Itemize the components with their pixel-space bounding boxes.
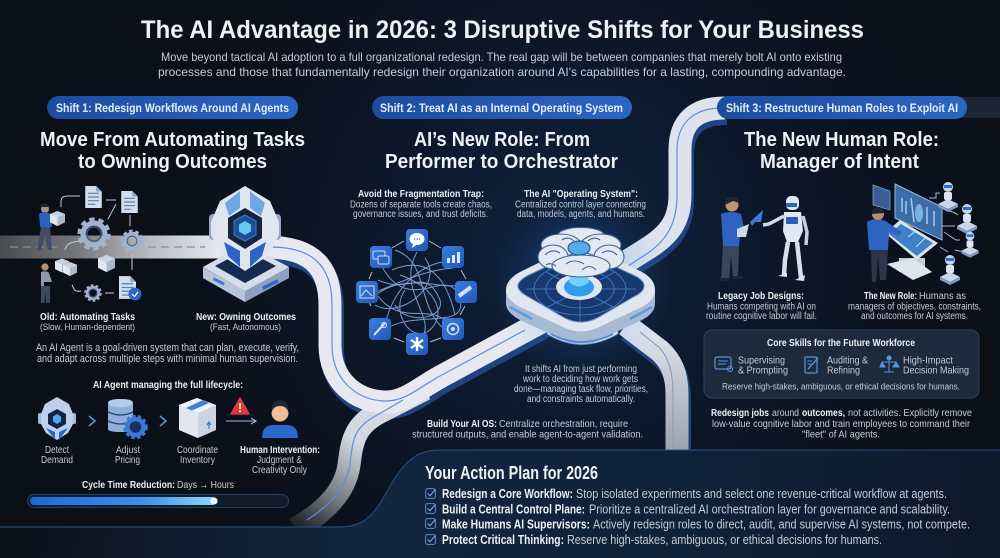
operating system text: data, models, agents, and humans. [517,209,645,220]
fragmentation text: Dozens of separate tools create chaos, [350,200,492,210]
lifecycle labels: Demand [41,455,73,466]
shift explanation: It shifts AI from just performing [525,364,637,375]
new label: New: Owning Outcomes [196,312,296,323]
human with laptop [720,197,749,281]
console [885,220,938,280]
new role text [848,291,981,322]
intro line 1: Move beyond tactical AI adoption to a full organizational redesign. The real gap will be between companies that merely bolt AI onto existing [161,50,842,64]
shift 1 heading: Move From Automating Tasks [40,128,305,151]
lifecycle labels: Inventory [180,455,215,466]
action item 4: Protect Critical Thinking: [442,533,564,547]
shift 3 heading: Manager of Intent [760,150,919,173]
redesign jobs text [711,407,972,440]
legacy text: Legacy Job Designs: [718,291,804,302]
brain [538,228,624,277]
new role illustration [867,182,979,285]
skill: supervising: Supervising [738,354,785,366]
agent definition: An AI Agent is a goal-driven system that can plan, execute, verify, [36,342,299,354]
platform grid [526,262,636,322]
operating system text [515,189,646,220]
cycle time: Days → Hours [177,479,234,491]
central AI platform [491,195,671,375]
speech panel [873,185,890,210]
tool icon: network [442,318,464,340]
lifecycle labels: Coordinate [177,445,218,456]
new role text: and outcomes for AI systems. [861,311,968,322]
tool icon: messages [370,246,392,268]
robot [763,196,807,281]
monitor [895,184,942,240]
manager person [867,207,902,282]
legacy text [706,291,817,322]
tangle [370,250,462,340]
lifecycle labels: Judgment & [257,455,302,466]
operating system text: The AI "Operating System": [524,189,638,200]
old: person with boxes [41,255,115,303]
shift explanation: done—managing task flow, priorities, [514,384,648,395]
redesign jobs text: around [772,407,799,419]
lifecycle: chevron [89,416,95,426]
fleet robots [938,182,958,212]
skill: auditing [805,354,868,376]
skill: supervising [715,354,788,376]
legacy text: routine cognitive labor will fail. [706,311,817,322]
skill: decision making: Decision Making [903,364,969,376]
panel: shift 2 [350,96,671,440]
road shadows [267,113,727,457]
shift 1 heading [40,128,305,173]
fragmentation text: Avoid the Fragmentation Trap: [358,189,484,200]
ring arrows [368,241,466,342]
shift 2 heading: Performer to Orchestrator [385,150,618,173]
shift 2 heading: AI’s New Role: From [414,128,590,151]
action plan heading: Your Action Plan for 2026 [425,463,598,483]
skill: auditing: Auditing & [827,354,868,366]
progress bar [28,494,288,508]
action item 2 [426,502,950,516]
new role text: Humans as [919,291,966,302]
shift explanation: and constraints automatically. [527,394,635,405]
shift 3 pill: Shift 3: Restructure Human Roles to Exploit AI [726,103,958,115]
action item 3: Make Humans AI Supervisors: [442,518,590,532]
skill: auditing: Refining [827,364,860,376]
cycle time: Cycle Time Reduction: [82,479,175,491]
road network [0,108,727,529]
skill: supervising: & Prompting [738,364,788,376]
fragmentation text: governance issues, and trust deficits. [353,209,488,220]
action item 4 [426,533,882,547]
action item 2: Build a Central Control Plane: [442,502,585,516]
fleet links [929,193,963,252]
intro line 2: processes and those that fundamentally redesign their organization around AI's capabilities for a lasting, compounding advantage. [158,65,846,79]
glowing core [556,274,602,300]
new role text: The New Role: [864,291,917,302]
new label [196,312,296,333]
lifecycle: box icon [179,398,216,438]
agent core illustration [203,186,289,302]
build your AI OS [412,418,643,440]
skill: decision making: High-Impact [903,354,953,366]
shift 1 pill [47,96,298,119]
lifecycle: database icon [108,399,146,438]
skill: decision making [880,354,969,376]
lifecycle: human icon [262,400,298,438]
core skills panel: Core Skills for the Future Workforce [767,337,915,349]
lifecycle labels: Human Intervention: [240,445,320,456]
redesign jobs text: outcomes, [802,407,845,419]
action item 1 [426,487,947,501]
old label: Old: Automating Tasks [40,312,135,323]
lifecycle labels: Creativity Only [252,465,307,476]
redesign jobs text: low-value cognitive labor and train employees to command their [712,418,970,430]
action item 1: Stop isolated experiments and select one revenue-critical workflow at agents. [576,487,947,501]
fragmented tools diagram [356,229,477,355]
lifecycle: chevron [160,416,166,426]
old: approved document [119,276,142,300]
lifecycle: warning icon [231,398,249,414]
panel: shift 1 [28,96,320,508]
shift 3 heading: The New Human Role: [744,128,939,151]
agent definition: and adapt across multiple steps with minimal human supervision. [37,353,298,365]
action item 2: Prioritize a centralized AI orchestration layer for governance and scalability. [589,502,950,516]
lifecycle labels: Adjust [116,445,140,456]
build your AI OS: structured outputs, and enable agent-to-agent validation. [412,428,643,440]
core skills panel: Reserve high-stakes, ambiguous, or ethical decisions for humans. [722,382,960,392]
tool icon: window [356,281,378,303]
legacy text: Humans competing with AI on [707,302,816,312]
lifecycle heading: AI Agent managing the full lifecycle: [93,379,243,391]
lifecycle labels: Pricing [115,455,140,466]
road lane lines [270,108,722,520]
new label: (Fast, Autonomous) [210,322,281,333]
shift 1 pill: Shift 1: Redesign Workflows Around AI Agents [56,103,289,115]
shift 1 heading: to Owning Outcomes [78,150,267,173]
shift 2 pill: Shift 2: Treat AI as an Internal Operating System [380,103,623,115]
core skills panel [704,330,979,398]
shift explanation: work to deciding how work gets [522,374,638,385]
lifecycle: arrow [226,418,256,424]
fragmentation text [350,189,492,220]
panel: shift 3 [704,96,1000,440]
road: lower branch [295,389,425,529]
shift explanation [514,364,648,405]
tool icon: pen [369,318,391,340]
road: core to lower right [626,325,677,452]
action item 3 [426,518,970,532]
build your AI OS: Build Your AI OS: [427,418,497,430]
tool icon: snowflake [406,333,428,355]
lifecycle labels [41,445,320,476]
old label [40,312,135,333]
operating system text: Centralized control layer connecting [515,200,646,210]
action item 1: Redesign a Core Workflow: [442,487,573,501]
action item 4: Reserve high-stakes, ambiguous, or ethical decisions for humans. [567,533,882,547]
redesign jobs text: Redesign jobs [711,407,769,419]
shift 2 heading [385,128,618,173]
lifecycle labels: Detect [45,445,69,456]
title: The AI Advantage in 2026: 3 Disruptive Shifts for Your Business [141,16,864,44]
shift 2 pill [372,96,632,119]
redesign jobs text: not activities. Explicitly remove [848,407,972,419]
legacy role illustration [720,196,807,281]
paper plane [750,210,763,226]
old: person with box [37,203,65,250]
build your AI OS: Centralize orchestration, require [499,418,628,430]
platform base [506,246,655,344]
shift 3 pill [717,96,967,119]
panel: action plan [0,450,1000,558]
redesign jobs text: "fleet" of AI agents. [802,428,880,440]
shift 3 heading [744,128,939,173]
tool icon: chat [406,229,428,251]
road: shift 1 to core [0,247,545,402]
old workflow illustration [37,186,142,303]
pill track [960,97,1000,118]
lifecycle: agent icon [38,397,76,440]
old label: (Slow, Human-dependent) [40,322,135,333]
tool icon: ruler [455,281,477,303]
tool icon: chart [442,246,464,268]
agent definition [36,342,299,365]
road: core to shift 3 [610,108,725,272]
intro text [158,50,846,79]
